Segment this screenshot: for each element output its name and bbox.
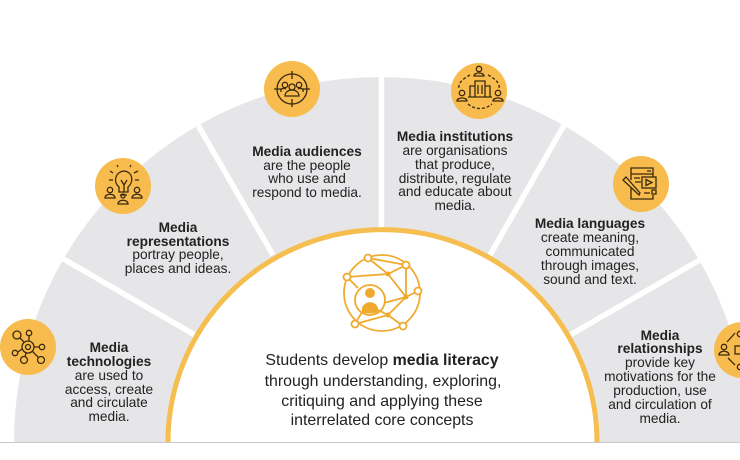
text: media institutions: distribute, regulate xyxy=(399,171,511,186)
text: media languages: communicated xyxy=(545,244,635,259)
text: media languages: create meaning, xyxy=(541,230,639,245)
text: media technologies: are used to xyxy=(75,368,144,383)
icon: lightbulb and people xyxy=(95,158,151,214)
text: media relationships: provide key xyxy=(625,355,695,370)
panel: central semicircle xyxy=(168,230,597,442)
icon: audience target xyxy=(264,61,320,117)
text: media technologies xyxy=(65,340,153,424)
text: media languages: through images, xyxy=(541,258,639,273)
text: media audiences: are the people xyxy=(263,158,351,173)
text: media representations xyxy=(125,220,231,276)
text: media representations: representations xyxy=(127,234,230,249)
text: media institutions xyxy=(397,129,514,213)
text: media relationships: production, use xyxy=(613,383,707,398)
text: media relationships: motivations for the xyxy=(604,369,716,384)
icon: central network with person xyxy=(344,254,422,331)
text: central statement: through understanding, exploring, xyxy=(265,373,501,390)
text: media languages: sound and text. xyxy=(543,272,637,287)
text: media technologies: and circulate xyxy=(70,395,148,410)
icon: technologies hub xyxy=(0,319,56,375)
text: media languages: Media languages xyxy=(535,216,646,231)
text: media technologies: technologies xyxy=(67,354,152,369)
text: media representations: portray people, xyxy=(132,247,224,262)
text: central statement: critiquing and applying these xyxy=(281,393,483,410)
text: media institutions: are organisations xyxy=(402,143,508,158)
panel: grey semicircle with segments xyxy=(14,70,740,442)
text: media relationships: media. xyxy=(639,411,681,426)
icon: institution building and people xyxy=(451,63,507,119)
text: media institutions: media. xyxy=(434,198,476,213)
text: media technologies: access, create xyxy=(65,382,153,397)
baseline xyxy=(0,442,740,444)
icon: relationships network xyxy=(714,322,740,378)
text: media representations: places and ideas. xyxy=(125,261,231,276)
text: media institutions: Media institutions xyxy=(397,129,514,144)
text: media audiences: Media audiences xyxy=(252,144,362,159)
text: central statement: interrelated core concepts xyxy=(291,412,473,429)
text: media technologies: Media xyxy=(90,340,129,355)
text: media institutions: and educate about xyxy=(398,184,512,199)
text: central statement: Students develop media literacy xyxy=(265,352,499,369)
icon: languages pencil and video xyxy=(613,156,669,212)
text: media relationships xyxy=(604,328,716,426)
text: media representations: Media xyxy=(159,220,198,235)
text: media technologies: media. xyxy=(88,409,130,424)
text: media relationships: Media xyxy=(641,328,680,343)
text: central statement xyxy=(265,352,501,429)
text: media audiences xyxy=(252,144,362,200)
text: media audiences: who use and xyxy=(267,171,346,186)
text: media languages xyxy=(535,216,646,287)
text: media audiences: respond to media. xyxy=(252,185,362,200)
text: media institutions: that produce, xyxy=(415,157,495,172)
text: media relationships: relationships xyxy=(617,341,703,356)
text: media relationships: and circulation of xyxy=(608,397,712,412)
